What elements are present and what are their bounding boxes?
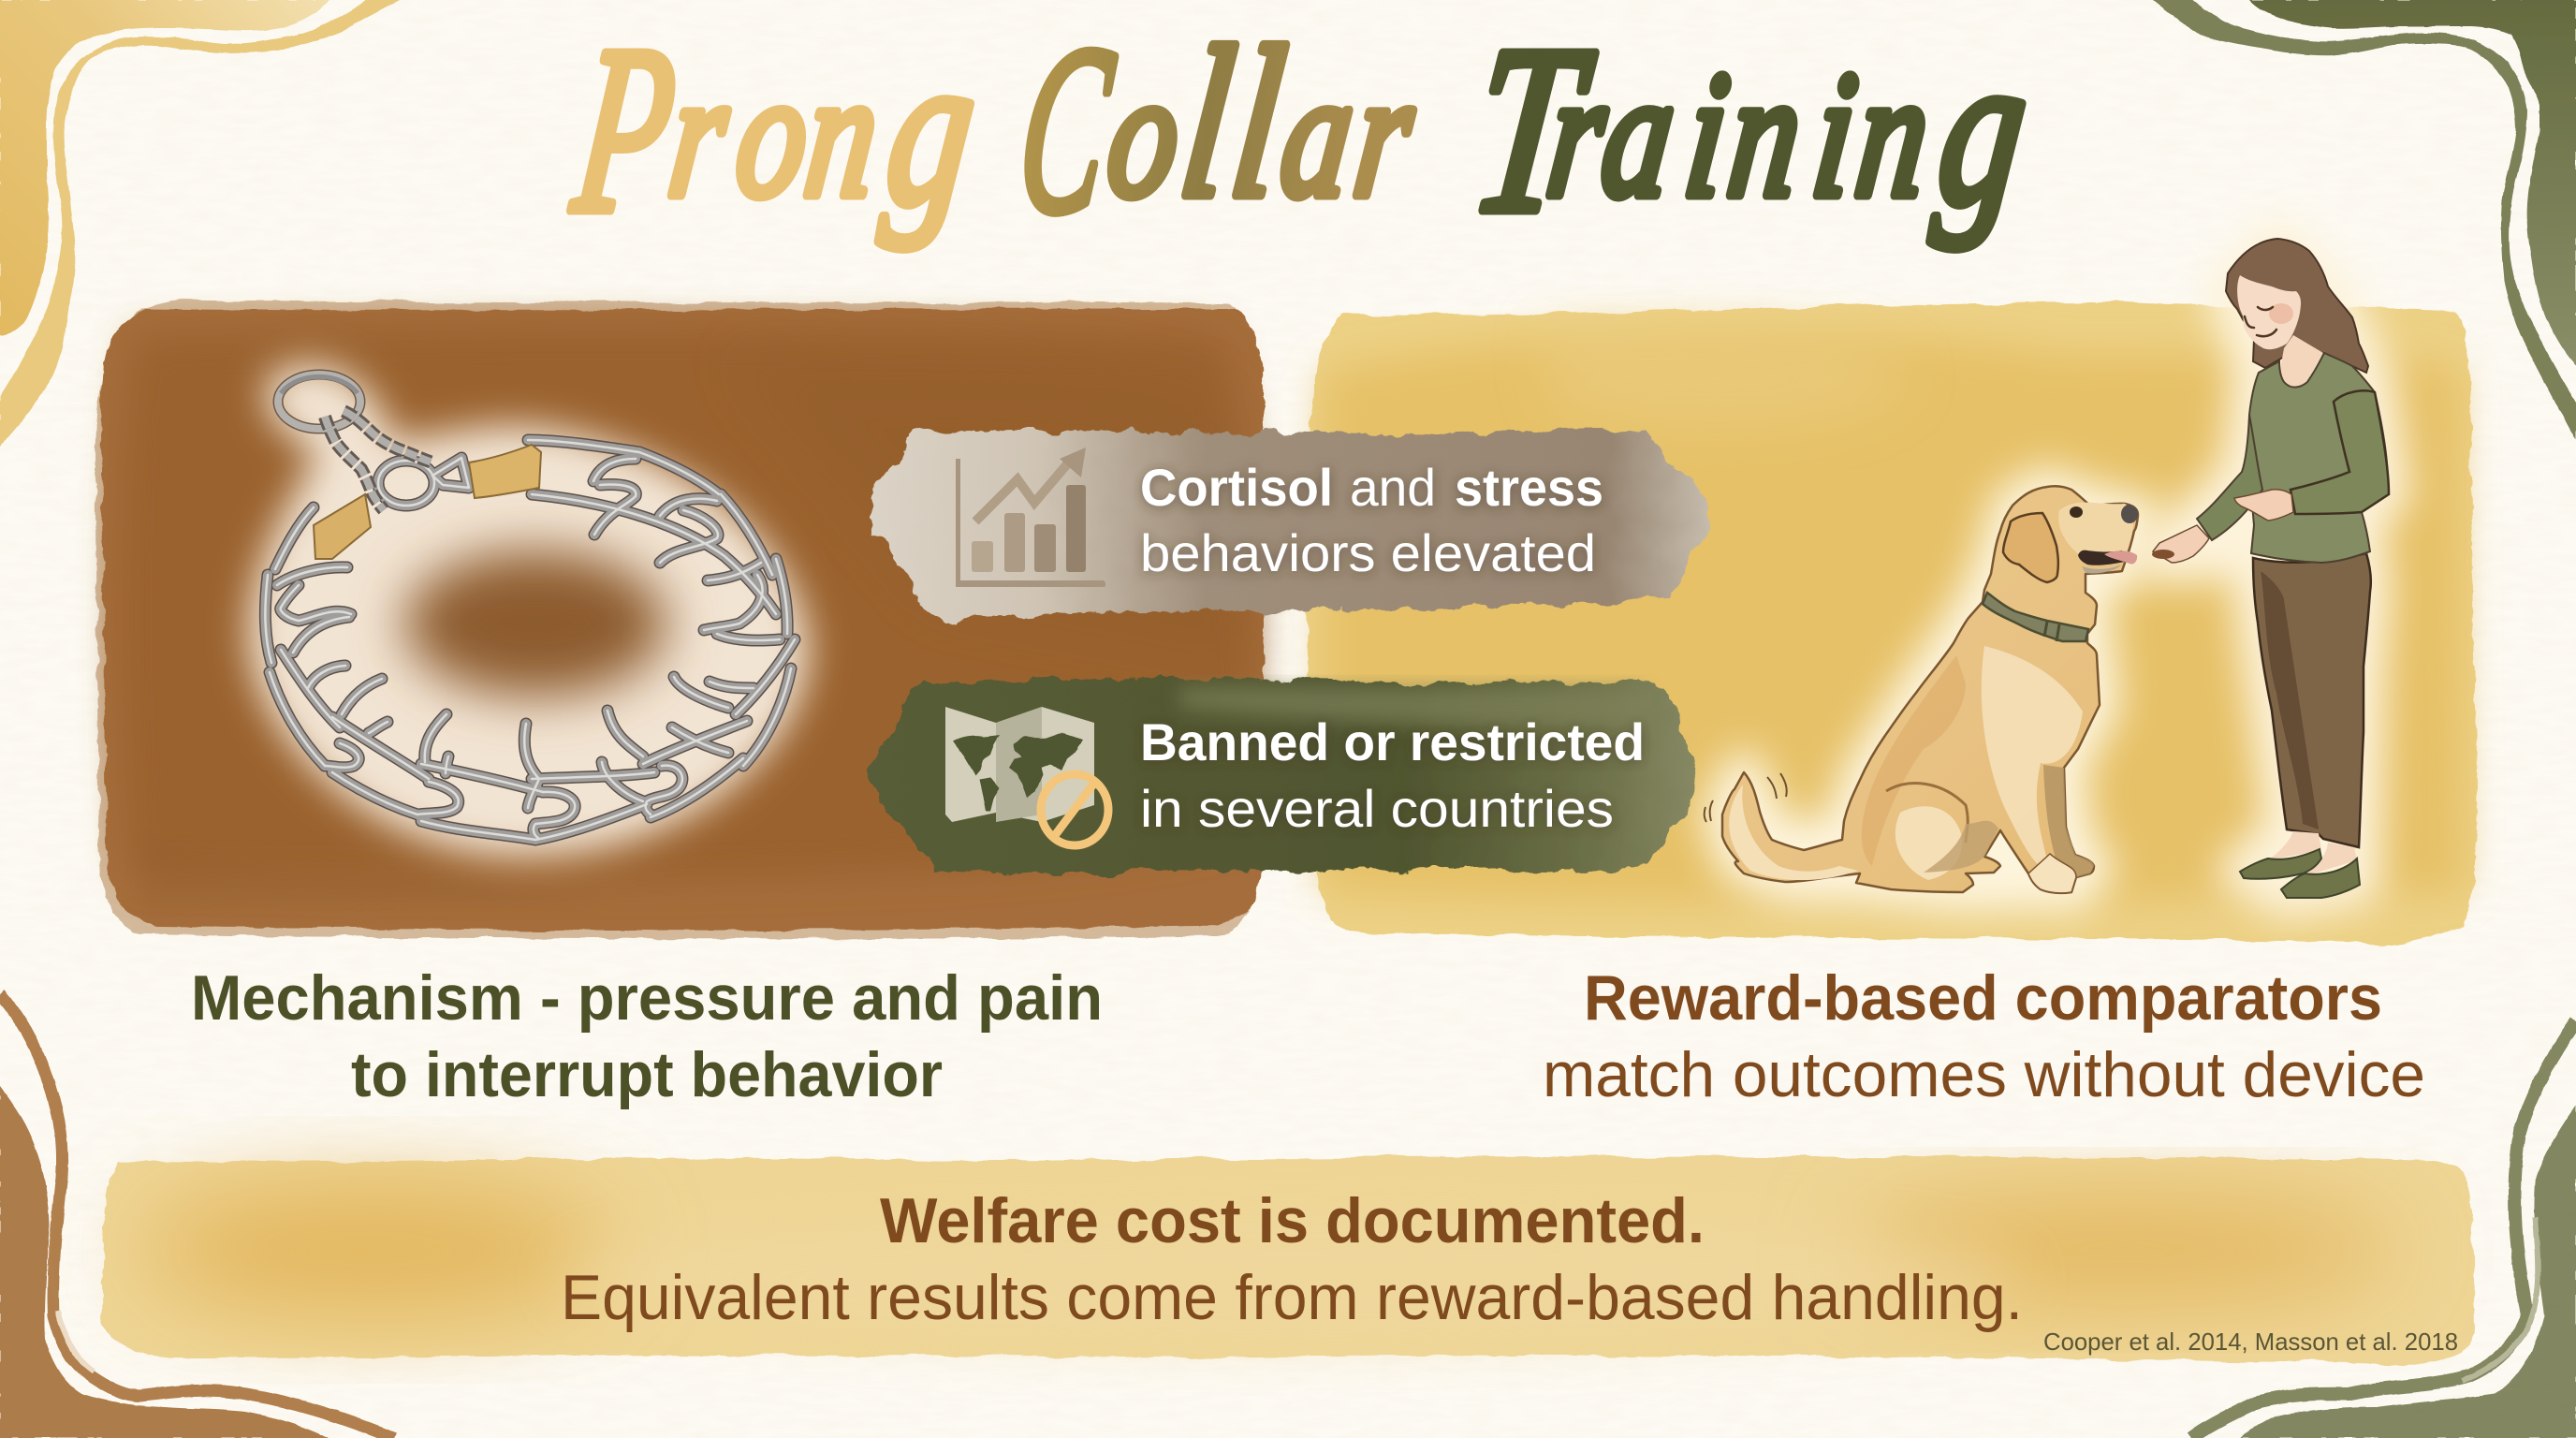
title word: Prong: P: [563, 0, 687, 261]
callout text: stress: [1455, 458, 1603, 517]
panel: mechanism (brown wash): [95, 300, 1264, 939]
handler trouser shadow: [2261, 571, 2319, 829]
corner wash: bottom right: [2191, 1021, 2576, 1438]
dog eye: [2070, 506, 2083, 518]
callout text: and: [1350, 458, 1436, 517]
title word: Training: rainin: [1539, 35, 1939, 234]
callout text: in several countries: [1140, 779, 1614, 838]
handler eye and smile: [2245, 307, 2276, 336]
title word: Prong: g: [877, 8, 987, 250]
title: [563, 0, 2040, 261]
dog chest highlight: [1982, 646, 2083, 871]
title word: Collar: ar: [1272, 35, 1423, 234]
dog jaw shadow: [2082, 565, 2121, 574]
illustration: golden retriever: [1705, 486, 2138, 893]
corner wash: bottom left: [0, 994, 394, 1438]
callout: cortisol and stress: [871, 429, 1710, 620]
handler cheek: [2269, 303, 2293, 324]
handler ankles: [2268, 831, 2357, 876]
caption: reward-based comparators: [1543, 962, 2425, 1110]
icon: folded world map: [945, 707, 1094, 822]
dog collar buckle: [2044, 622, 2059, 641]
caption: mechanism: Mechanism - pressure and pain: [191, 962, 1103, 1034]
callout text: Banned or restricted: [1140, 712, 1645, 771]
callout: banned or restricted: [870, 679, 1696, 872]
dog back shading: [1862, 655, 1966, 866]
takeaway headline: Welfare cost is documented.: [880, 1185, 1705, 1256]
icon: rising bar chart: [956, 448, 1105, 587]
title word: Collar: ll: [1171, 4, 1295, 242]
callout text: Cortisol: [1140, 458, 1333, 517]
handler sweater: [2249, 353, 2389, 563]
handler hair: [2226, 239, 2368, 373]
handler hand near body: [2234, 490, 2293, 521]
handler shoes: [2240, 849, 2321, 879]
title word: Training: g: [1928, 8, 2039, 250]
takeaway body: Equivalent results come from reward-based handling.: [561, 1262, 2023, 1333]
callout text: behaviors elevated: [1140, 523, 1596, 582]
handler neck: [2279, 335, 2323, 389]
collar glow: [248, 363, 810, 857]
handler outstretched sleeve: [2197, 415, 2262, 540]
illustration: prong collar: [265, 374, 795, 840]
corner wash: top left: [0, 0, 400, 447]
glow behind dog and handler: [1722, 239, 2389, 898]
title word: Training: T: [1461, 0, 1603, 261]
title word: Collar: C: [1008, 0, 1124, 261]
dog muzzle: [2058, 503, 2133, 562]
collar brass plate: upper: [469, 445, 541, 498]
handler trousers: [2253, 553, 2371, 847]
corner wash: top right: [2153, 0, 2576, 440]
collar chains: [325, 411, 432, 510]
icon: prohibition sign: [1041, 774, 1108, 845]
handler hand with treat: [2153, 525, 2209, 563]
dog nose: [2121, 505, 2138, 523]
handler folded sleeve: [2291, 390, 2389, 514]
callout text: [1140, 712, 1645, 838]
callout text: [1140, 458, 1603, 582]
treat: [2152, 550, 2174, 559]
dog collar: [1983, 593, 2088, 641]
caption: reward-based comparators: Reward-based comparators: [1584, 962, 2382, 1034]
caption: reward-based comparators: match outcomes without device: [1543, 1039, 2425, 1110]
panel: reward-based (yellow wash): [1307, 239, 2477, 944]
dog tail feathering: [1729, 785, 1858, 880]
dog tail motion marks: [1705, 773, 1787, 822]
dog ear: [2003, 513, 2058, 582]
dog thigh line: [1886, 784, 1968, 843]
map continents: [953, 733, 1083, 811]
caption: mechanism: [191, 962, 1103, 1110]
takeaway banner: [101, 1156, 2475, 1365]
dog haunch: [1895, 806, 1962, 880]
dog silhouette: [1722, 486, 2138, 893]
dog far front leg: [2043, 765, 2094, 877]
illustration: handler: [2152, 239, 2389, 898]
caption: mechanism: to interrupt behavior: [351, 1039, 943, 1110]
dog tongue: [2104, 550, 2137, 565]
dog front paws: [2028, 854, 2076, 893]
title word: Prong: ron: [661, 35, 888, 234]
collar ring: [278, 374, 360, 429]
collar brass plate: lower: [314, 494, 371, 559]
title word: Collar: o: [1099, 35, 1190, 234]
handler face: [2237, 275, 2301, 349]
dog hind-leg shadow: [1924, 821, 1998, 873]
dog mouth: [2078, 550, 2125, 565]
citation: Cooper et al. 2014, Masson et al. 2018: [2043, 1328, 2458, 1356]
